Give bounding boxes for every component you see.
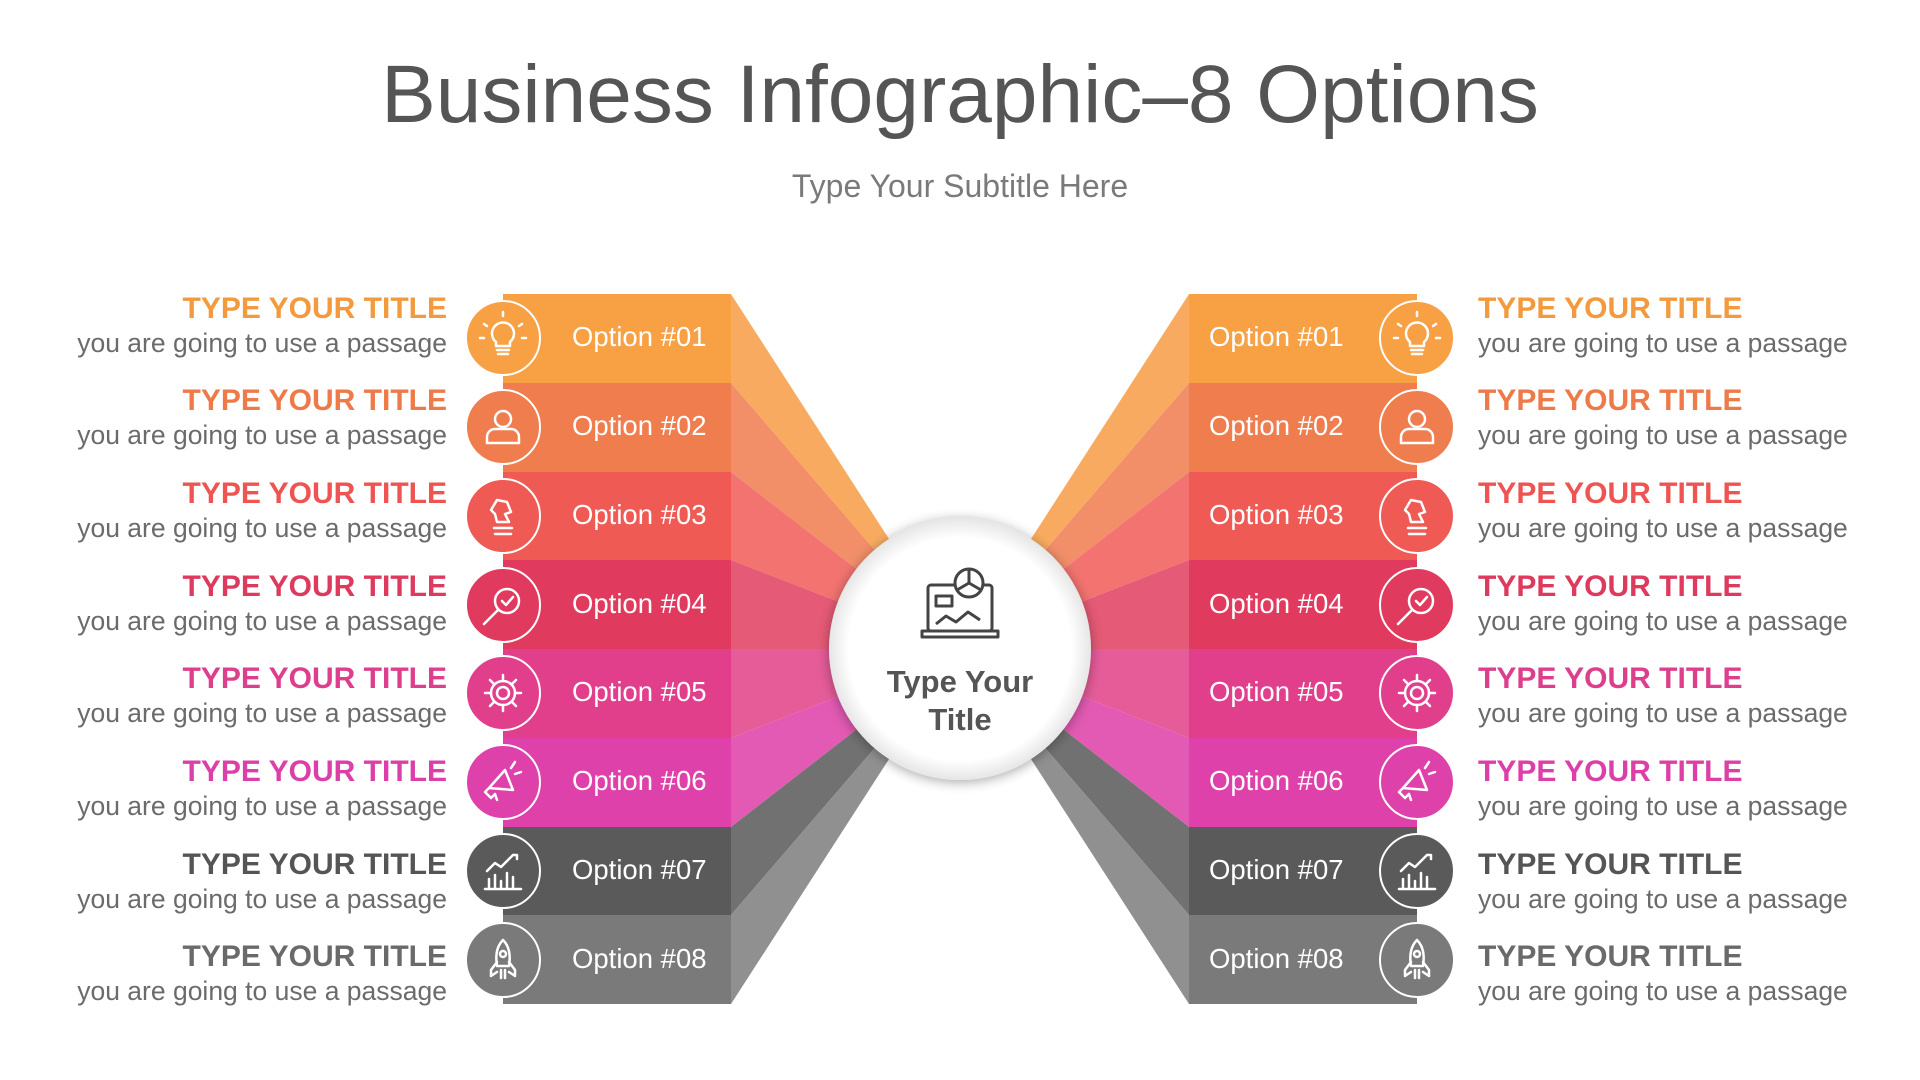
text blocks left: TYPE YOUR TITLE xyxy=(183,940,447,973)
text blocks left: you are going to use a passage xyxy=(77,606,447,636)
title: Business Infographic–8 Options xyxy=(381,49,1539,140)
icons right xyxy=(1380,301,1454,997)
text: Option #07 xyxy=(1209,854,1344,885)
icons left xyxy=(466,301,540,997)
text: Option #01 xyxy=(572,321,707,352)
text blocks left: you are going to use a passage xyxy=(77,420,447,450)
option labels left xyxy=(572,321,707,974)
text blocks left: TYPE YOUR TITLE xyxy=(183,662,447,695)
option labels right xyxy=(1209,321,1344,974)
text blocks right: TYPE YOUR TITLE xyxy=(1478,570,1742,603)
text blocks left: you are going to use a passage xyxy=(77,791,447,821)
text blocks right: TYPE YOUR TITLE xyxy=(1478,662,1742,695)
text blocks right: you are going to use a passage xyxy=(1478,513,1848,543)
text: Option #05 xyxy=(1209,676,1344,707)
text: Option #03 xyxy=(572,499,707,530)
text blocks left: you are going to use a passage xyxy=(77,513,447,543)
text: Option #07 xyxy=(572,854,707,885)
subtitle: Type Your Subtitle Here xyxy=(792,168,1128,204)
text: Option #04 xyxy=(1209,588,1344,619)
text blocks right: TYPE YOUR TITLE xyxy=(1478,755,1742,788)
text blocks left: TYPE YOUR TITLE xyxy=(183,848,447,881)
text: Option #02 xyxy=(1209,410,1344,441)
text blocks left: you are going to use a passage xyxy=(77,884,447,914)
text: Option #04 xyxy=(572,588,707,619)
text: Option #08 xyxy=(572,943,707,974)
text blocks right xyxy=(1478,292,1848,1006)
text blocks right: you are going to use a passage xyxy=(1478,976,1848,1006)
text blocks left: TYPE YOUR TITLE xyxy=(183,292,447,325)
text blocks right: you are going to use a passage xyxy=(1478,328,1848,358)
text: Option #03 xyxy=(1209,499,1344,530)
text blocks left xyxy=(77,292,447,1006)
text blocks right: TYPE YOUR TITLE xyxy=(1478,384,1742,417)
text blocks right: TYPE YOUR TITLE xyxy=(1478,848,1742,881)
text blocks right: TYPE YOUR TITLE xyxy=(1478,292,1742,325)
right rays xyxy=(960,294,1189,1004)
text blocks left: TYPE YOUR TITLE xyxy=(183,384,447,417)
text: Option #08 xyxy=(1209,943,1344,974)
text: Option #05 xyxy=(572,676,707,707)
text blocks right: TYPE YOUR TITLE xyxy=(1478,940,1742,973)
text blocks left: you are going to use a passage xyxy=(77,976,447,1006)
text: Option #06 xyxy=(572,765,707,796)
right bars xyxy=(1189,294,1417,1004)
text blocks right: you are going to use a passage xyxy=(1478,698,1848,728)
text blocks right: you are going to use a passage xyxy=(1478,606,1848,636)
text: Option #01 xyxy=(1209,321,1344,352)
text blocks left: you are going to use a passage xyxy=(77,328,447,358)
text blocks left: TYPE YOUR TITLE xyxy=(183,570,447,603)
text blocks right: TYPE YOUR TITLE xyxy=(1478,477,1742,510)
center circle xyxy=(829,518,1091,780)
center circle: Title xyxy=(928,702,992,737)
left rays xyxy=(731,294,960,1004)
text: Option #06 xyxy=(1209,765,1344,796)
text blocks left: you are going to use a passage xyxy=(77,698,447,728)
center title: Type Your xyxy=(887,664,1033,699)
text blocks right: you are going to use a passage xyxy=(1478,791,1848,821)
text blocks right: you are going to use a passage xyxy=(1478,420,1848,450)
icon: laptop chart xyxy=(922,569,998,637)
text blocks left: TYPE YOUR TITLE xyxy=(183,477,447,510)
left bars xyxy=(503,294,731,1004)
text: Option #02 xyxy=(572,410,707,441)
text blocks left: TYPE YOUR TITLE xyxy=(183,755,447,788)
text blocks right: you are going to use a passage xyxy=(1478,884,1848,914)
